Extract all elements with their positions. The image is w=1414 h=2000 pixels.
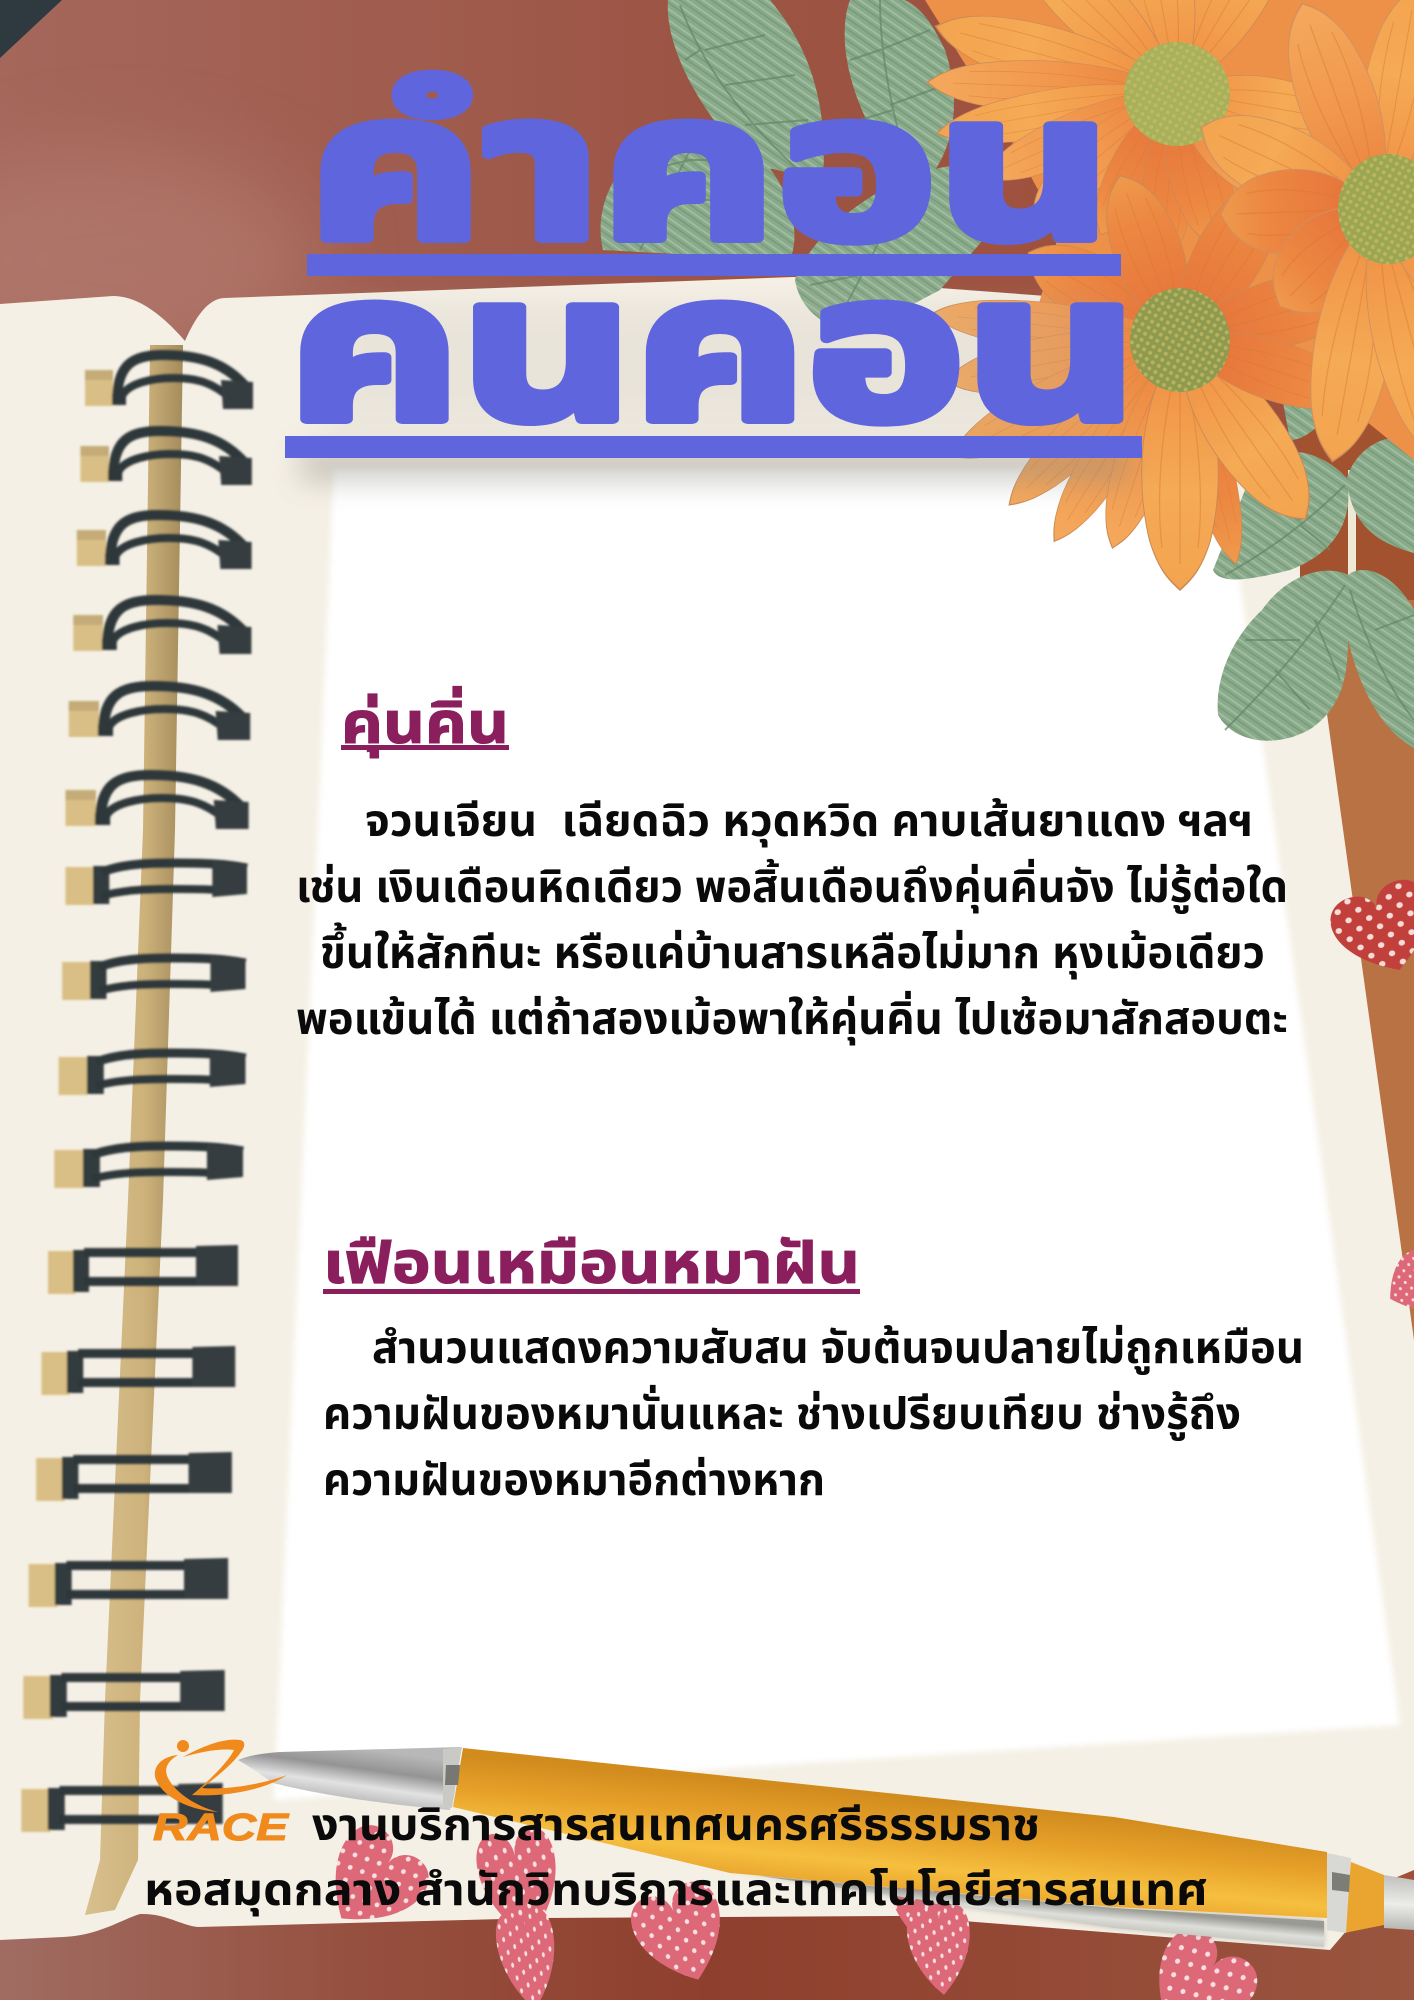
RACE logo: RACE	[153, 1807, 290, 1849]
body text: เฟือนเหมือนหมาฝัน definition: ความฝันของหมานั่นแหละ ช่างเปรียบเทียบ ช่างรู้ถึง	[323, 1385, 1241, 1441]
footer text line 1: งานบริการสารสนเทศนครศรีธรรมราช	[312, 1801, 1040, 1850]
polka dot hearts	[305, 873, 1414, 2000]
section heading: คุ่นคิ่น: คุ่นคิ่น	[341, 685, 509, 758]
body text: คุ่นคิ่น definition: เช่น เงินเดือนหิดเดียว พอสิ้นเดือนถึงคุ่นคิ่นจัง ไม่รู้ต่อใด	[296, 859, 1288, 914]
orange flower 1	[926, 0, 1355, 268]
body text: คุ่นคิ่น definition	[296, 797, 1288, 1046]
body text: คุ่นคิ่น definition: พอแข้นได้ แต่ถ้าสองเม้อพาให้คุ่นคิ่น ไปเซ้อมาสักสอบตะ	[296, 991, 1288, 1046]
green leaves, right side	[1213, 383, 1414, 748]
orange flower 3	[929, 161, 1382, 590]
title line 1: คำคอน	[308, 54, 1112, 282]
title background shadow	[300, 300, 1130, 482]
spiral binding rings	[21, 355, 253, 1832]
RACE logo	[153, 1740, 290, 1849]
body text: เฟือนเหมือนหมาฝัน definition	[323, 1324, 1304, 1505]
body text: เฟือนเหมือนหมาฝัน definition: ความฝันของหมาอีกต่างหาก	[323, 1456, 825, 1505]
flower mass underlay	[925, 0, 1414, 460]
notebook spine	[85, 345, 183, 1915]
body text: คุ่นคิ่น definition: จวนเจียน เฉียดฉิว หวุดหวิด คาบเส้นยาแดง ฯลฯ	[365, 797, 1253, 848]
pen	[238, 1747, 1414, 1947]
orange flower 2	[1185, 0, 1414, 472]
section heading: เฟือนเหมือนหมาฝัน: เฟือนเหมือนหมาฝัน	[323, 1231, 860, 1296]
footer text line 2: หอสมุดกลาง สำนักวิทบริการและเทคโนโลยีสารสนเทศ	[144, 1866, 1208, 1917]
white writing area	[274, 470, 1400, 1800]
green leaves, top	[601, 0, 1000, 332]
body text: เฟือนเหมือนหมาฝัน definition: สำนวนแสดงความสับสน จับต้นจนปลายไม่ถูกเหมือน	[372, 1324, 1304, 1375]
body text: คุ่นคิ่น definition: ขึ้นให้สักทีนะ หรือแค่บ้านสารเหลือไม่มาก หุงเม้อเดียว	[320, 922, 1265, 980]
title line 2: คนคอน	[288, 235, 1138, 463]
